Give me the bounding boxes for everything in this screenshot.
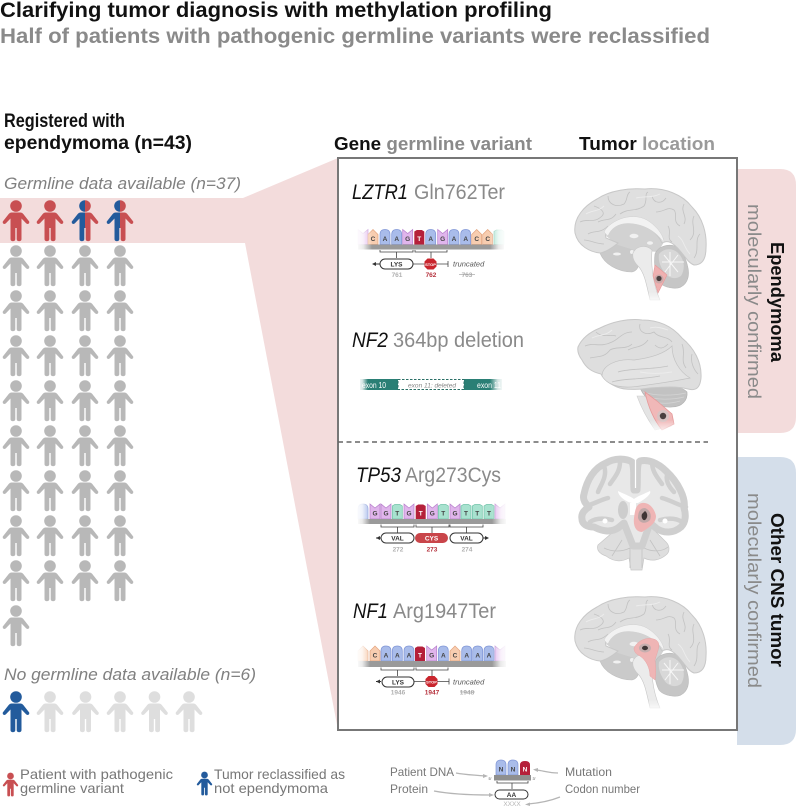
brain: sagittal, midline tumor [575, 597, 706, 712]
protein translation [372, 250, 485, 279]
DNA sequence: G [440, 236, 445, 243]
key labels: Patient DNA [390, 765, 454, 779]
DNA sequence: G [372, 510, 378, 518]
gene label: TP53 [356, 464, 401, 487]
exon diagram: exon 11: deleted [408, 382, 456, 389]
DNA sequence: A [464, 652, 469, 660]
DNA sequence [356, 643, 508, 669]
legend: tumor reclassified: not ependymoma [214, 780, 328, 796]
protein translation: STOP [425, 262, 436, 267]
DNA sequence: A [428, 236, 433, 243]
gene label: 364bp deletion [393, 329, 524, 352]
key labels: Codon number [565, 782, 640, 796]
gene label: NF1 [353, 600, 388, 623]
DNA sequence: A [463, 236, 468, 243]
DNA sequence: A [475, 652, 480, 660]
DNA sequence [356, 226, 506, 251]
protein translation: 761 [392, 272, 403, 279]
DNA sequence: A [487, 652, 492, 660]
protein translation [376, 524, 489, 554]
protein translation: 1947 [425, 690, 440, 696]
protein translation: 1948 [460, 690, 475, 696]
legend: tumor reclassified: Tumor reclassified as [214, 766, 345, 782]
panel: germline variants and tumor locations [338, 158, 737, 730]
DNA sequence: A [383, 236, 388, 243]
key DNA tile: XXXX [503, 801, 521, 808]
DNA sequence: T [417, 236, 421, 243]
exon diagram: exon 11 [477, 381, 501, 390]
protein translation: LYS [390, 261, 403, 268]
DNA sequence: T [418, 652, 422, 660]
protein translation [376, 668, 485, 696]
tab: ependymoma molecularly confirmed: molecularly confirmed [744, 204, 764, 399]
gene label: NF2 [352, 329, 388, 352]
key DNA tile: 5' [488, 776, 492, 781]
DNA sequence: T [464, 510, 468, 518]
DNA sequence: G [452, 510, 458, 518]
key DNA tile: 3' [532, 776, 536, 781]
cohort heading: Registered with [4, 111, 125, 132]
gene label: LZTR1 [352, 181, 408, 204]
subtitle: Half of patients with pathogenic germline variants were reclassified [0, 25, 710, 48]
DNA sequence: A [407, 652, 412, 660]
tab: other CNS tumor molecularly confirmed [737, 457, 796, 745]
protein translation: 762 [426, 272, 437, 279]
DNA sequence: C [371, 236, 376, 243]
DNA sequence: T [395, 510, 399, 518]
column heading: gene germline variant: Gene germline variant [334, 134, 532, 154]
key arrows [434, 770, 560, 804]
cohort heading: ependymoma (n=43) [4, 133, 192, 154]
protein translation: STOP [426, 679, 437, 684]
key DNA tile: N [523, 766, 528, 774]
germline available label: Germline data available (n=37) [4, 174, 241, 193]
protein translation: truncated [453, 678, 485, 686]
cohort heading [4, 111, 192, 154]
title [0, 0, 710, 48]
DNA sequence: A [394, 236, 399, 243]
TP53 variant [356, 464, 508, 554]
DNA sequence: C [485, 236, 490, 243]
key labels [390, 765, 640, 796]
DNA sequence [356, 501, 508, 526]
key DNA tile: N [511, 766, 516, 774]
DNA sequence: A [395, 652, 400, 660]
protein translation: LYS [392, 679, 405, 686]
legend: patient with pathogenic germline variant: germline variant [20, 780, 124, 796]
DNA sequence: G [430, 510, 435, 518]
protein translation: CYS [425, 535, 439, 542]
gene label [353, 600, 496, 623]
protein translation: 274 [462, 546, 473, 554]
protein translation: truncated [453, 260, 485, 268]
legend: patient with pathogenic germline variant [3, 766, 173, 796]
gene label: Gln762Ter [414, 181, 505, 204]
tab: ependymoma molecularly confirmed [737, 169, 796, 433]
tab: ependymoma molecularly confirmed: Ependymoma [767, 242, 787, 363]
NF1 variant [353, 600, 508, 696]
DNA sequence: T [419, 510, 423, 518]
patients without pathogenic variants [3, 245, 133, 646]
exon diagram [358, 378, 504, 391]
key labels: Mutation [565, 765, 612, 779]
NF2 variant [352, 329, 524, 391]
legend: diagram key [390, 760, 640, 808]
protein translation: 272 [393, 546, 404, 554]
DNA sequence: C [373, 652, 378, 660]
pictogram: patients with germline data [3, 200, 133, 646]
protein translation: 763 [462, 272, 473, 279]
DNA sequence: T [441, 510, 445, 518]
DNA sequence: G [406, 510, 412, 518]
legend: patient with pathogenic germline variant: Patient with pathogenic [20, 766, 173, 782]
LZTR1 variant [352, 181, 506, 279]
pictogram: patients without germline data [3, 691, 202, 732]
protein translation: 273 [427, 546, 438, 554]
DNA sequence: G [383, 510, 389, 518]
tab: other CNS tumor molecularly confirmed: molecularly confirmed [744, 493, 764, 688]
DNA sequence: T [487, 510, 491, 518]
DNA sequence: A [452, 236, 457, 243]
key DNA tile [488, 760, 536, 808]
gene label [352, 181, 505, 204]
gene label [356, 464, 501, 487]
brain: coronal, midline tumor [582, 456, 686, 570]
key labels: Protein [390, 782, 428, 796]
gene label: Arg273Cys [405, 464, 501, 487]
highlight band connecting germline patients to panel [0, 158, 338, 730]
DNA sequence: C [474, 236, 479, 243]
protein translation: VAL [391, 535, 404, 542]
DNA sequence: G [429, 652, 434, 660]
DNA sequence: A [441, 652, 446, 660]
legend: tumor reclassified [197, 766, 345, 796]
protein translation: VAL [460, 535, 473, 542]
DNA sequence: T [475, 510, 479, 518]
column heading: tumor location: Tumor location [579, 134, 715, 154]
divider [338, 441, 708, 443]
DNA sequence: G [405, 236, 410, 243]
key DNA tile: N [499, 766, 504, 774]
DNA sequence: C [453, 652, 458, 660]
patients with pathogenic variants [3, 200, 133, 241]
no germline label: No germline data available (n=6) [4, 665, 256, 684]
brain: lateral, spinal tumor [578, 319, 701, 434]
DNA sequence: A [384, 652, 389, 660]
protein translation: 1946 [391, 690, 406, 696]
exon diagram: exon 10 [362, 381, 386, 390]
gene label: Arg1947Ter [393, 600, 496, 623]
key DNA tile: AA [507, 792, 516, 799]
brain: sagittal, brainstem tumor [575, 189, 706, 304]
tab: other CNS tumor molecularly confirmed: Other CNS tumor [767, 513, 787, 667]
